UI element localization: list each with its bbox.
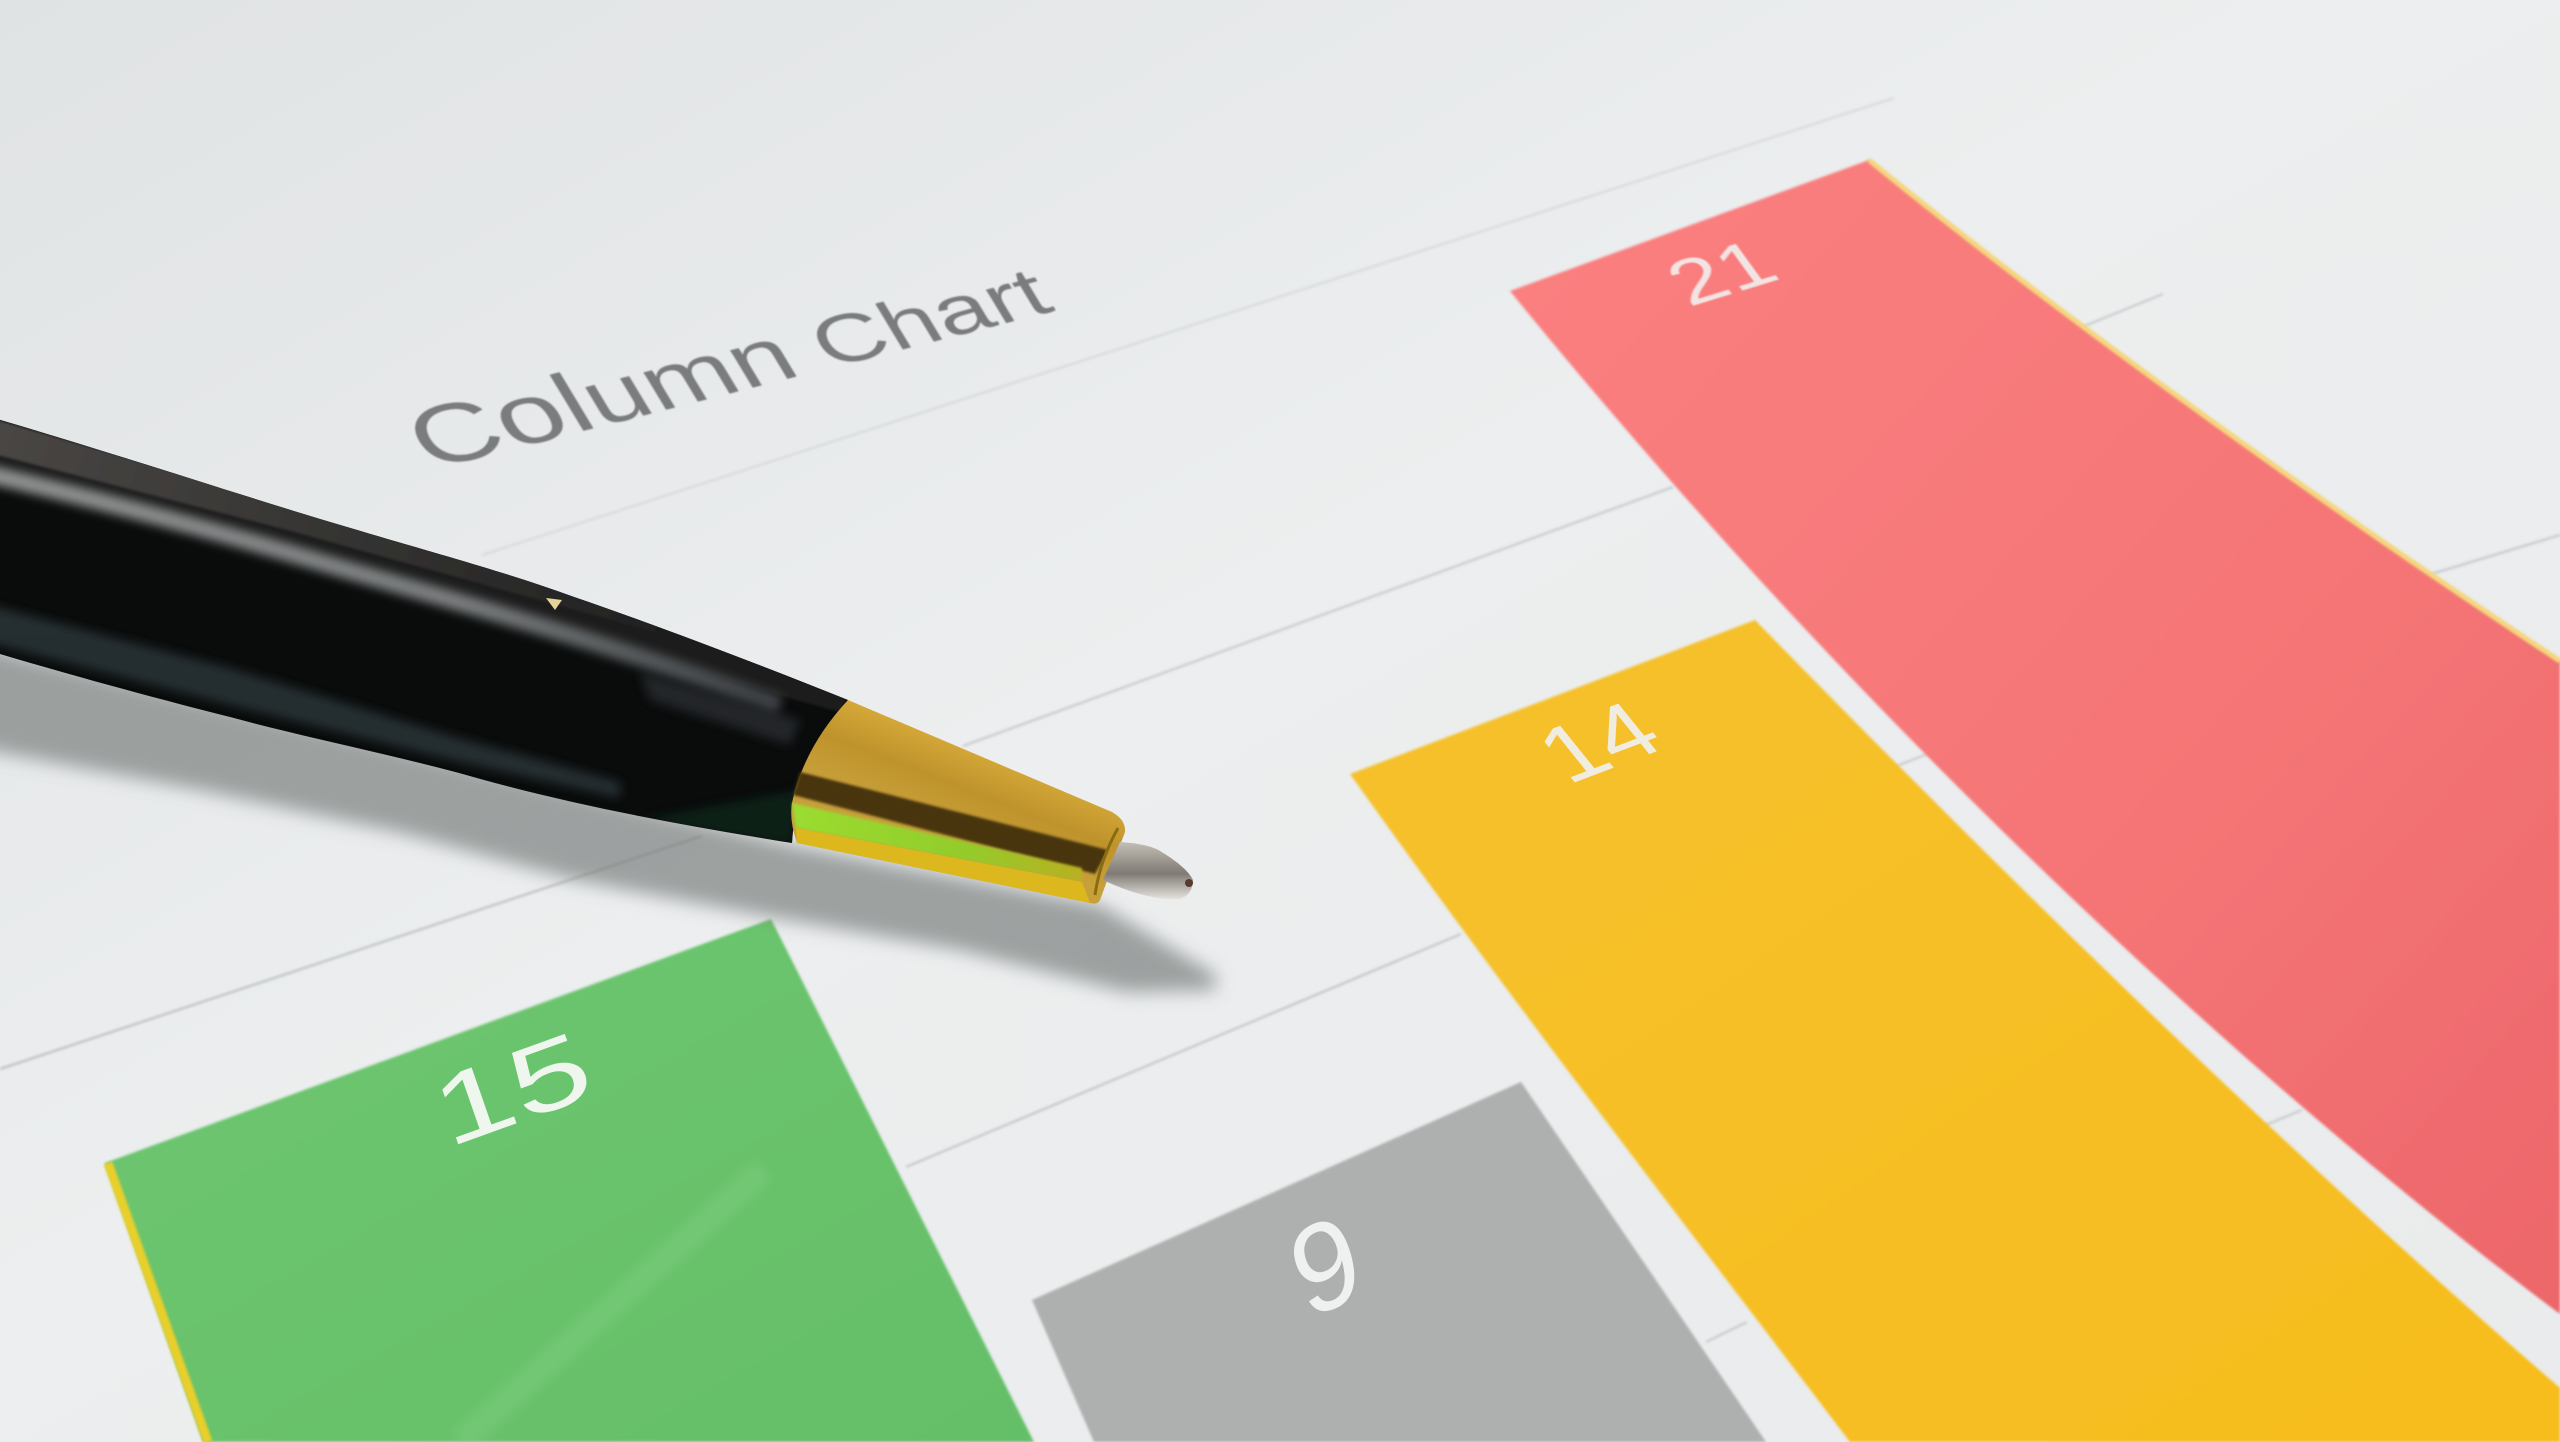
value label 21: 21 xyxy=(1651,226,1792,319)
value label 15: 15 xyxy=(419,1011,605,1168)
pen barrel xyxy=(0,414,848,843)
column: green 15 xyxy=(105,919,1034,1442)
value label 9: 9 xyxy=(1275,1186,1376,1345)
pen shadow xyxy=(0,640,1216,992)
gold tip cone xyxy=(791,700,1125,904)
column: gray 9 xyxy=(1032,1082,1766,1442)
silver ball point xyxy=(1103,842,1193,899)
column: yellow 14 xyxy=(1350,620,2560,1442)
column: red 21 xyxy=(1510,160,2560,1314)
icon: ballpoint pen xyxy=(0,405,1193,904)
chart title: Column Chart xyxy=(388,241,1067,487)
value label 14: 14 xyxy=(1517,684,1680,800)
